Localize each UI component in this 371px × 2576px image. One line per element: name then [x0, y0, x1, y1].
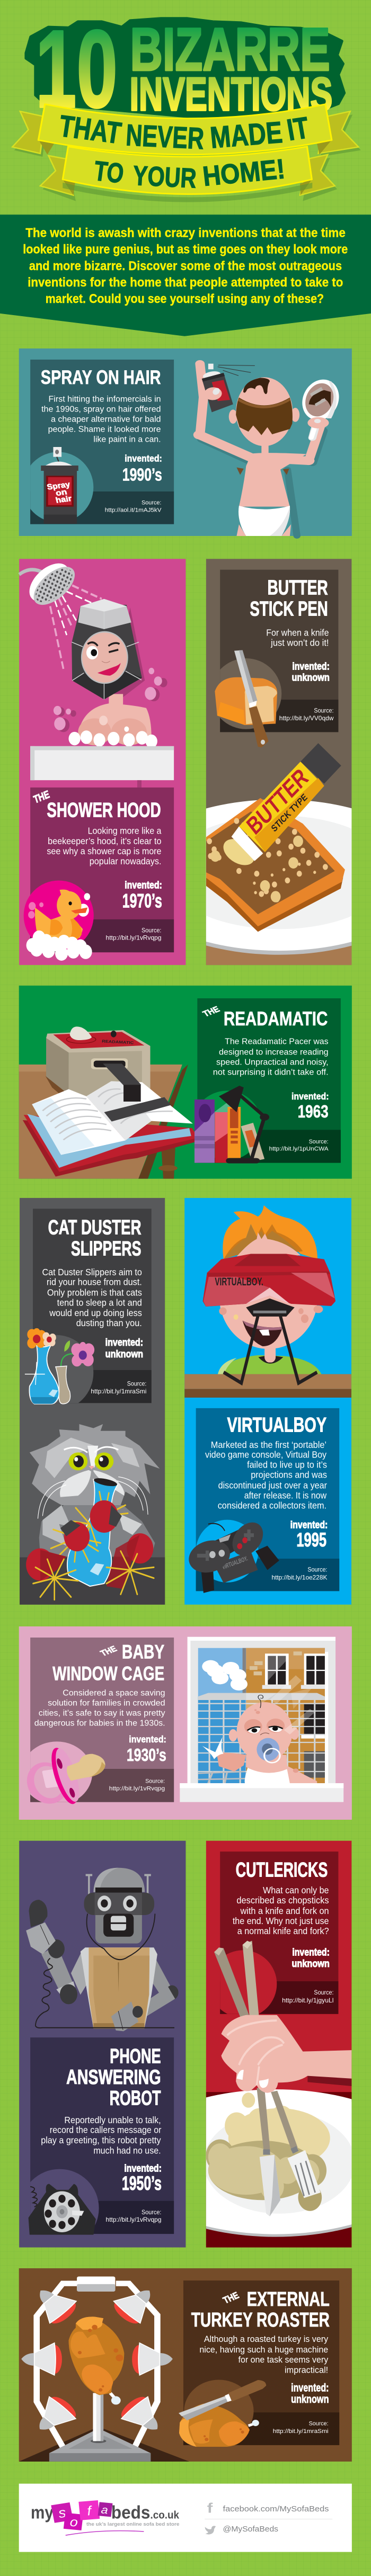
whiskers — [38, 1477, 148, 1519]
invented date — [127, 1734, 166, 1765]
intro chevron background — [0, 214, 371, 336]
torso — [239, 453, 306, 507]
antennas — [86, 1875, 151, 1898]
description: see why a shower cap is more — [47, 846, 161, 856]
description: the end. Why not just use — [233, 1916, 329, 1926]
description — [233, 1885, 329, 1937]
source: Source: — [309, 1139, 329, 1145]
source — [273, 2420, 329, 2435]
invented date: invented: — [291, 2381, 329, 2394]
invented date — [292, 1947, 330, 1969]
description: failed to live up to it’s — [247, 1460, 327, 1470]
description: much had no use. — [93, 2146, 161, 2156]
machine base — [49, 2393, 151, 2462]
facebook link — [207, 2500, 329, 2516]
facebook link: f — [207, 2500, 213, 2516]
hair — [236, 398, 293, 435]
heading — [48, 1215, 142, 1260]
source: http://bit.ly/1vRvqpg — [109, 1785, 165, 1792]
illustration: woman in shower hood — [19, 553, 174, 788]
lamp frame — [37, 2284, 157, 2447]
panel: readamatic — [19, 986, 352, 1179]
description: popular nowadays. — [90, 856, 161, 866]
source — [109, 1778, 165, 1792]
source: http://bit.ly/1jgyuLl — [282, 1997, 333, 2004]
description — [266, 628, 329, 648]
shadow — [111, 607, 145, 706]
invented date: 1995 — [296, 1529, 326, 1551]
source: Source: — [314, 708, 333, 714]
heading: ANSWERING — [66, 2065, 161, 2088]
description: Only problem is that cats — [47, 1288, 142, 1298]
logo: my sofa beds: the uk’s largest online sofa bed store — [86, 2521, 180, 2527]
butter stick — [220, 743, 341, 870]
info card — [210, 570, 338, 732]
description — [199, 2334, 329, 2375]
invented date: invented: — [292, 660, 330, 672]
stand legs — [224, 1316, 317, 1383]
invented date: unknown — [291, 2392, 329, 2405]
footer panel — [19, 2484, 352, 2552]
source — [269, 1139, 329, 1152]
description: nice, having such a huge machine — [199, 2345, 328, 2355]
source: Source: — [314, 1989, 333, 1996]
icon: vases and flowers — [25, 1328, 94, 1404]
icon: rotary telephone — [29, 2184, 96, 2235]
description: cities, it’s safe to say it was pretty — [39, 1709, 165, 1718]
logo: my sofa beds: beds — [111, 2502, 150, 2523]
source: Source: — [142, 499, 161, 506]
description: tend to sleep a lot and — [57, 1298, 142, 1308]
banner text line one: NEVER — [125, 118, 205, 156]
hood — [72, 605, 142, 700]
heading: SHOWER HOOD — [47, 798, 161, 821]
toast spots — [209, 821, 325, 899]
info card — [23, 360, 174, 524]
description — [42, 1267, 142, 1328]
heading: BUTTER — [267, 576, 328, 599]
heading: PHONE — [110, 2044, 161, 2068]
hand — [221, 2015, 351, 2093]
source — [105, 499, 162, 513]
invented date: invented: — [290, 1519, 328, 1531]
description: Considered a space saving — [63, 1688, 165, 1697]
window illustration — [180, 1637, 343, 1802]
icon: game controller — [186, 1516, 279, 1593]
description: with a knife and fork on — [240, 1906, 329, 1916]
panel: cat duster slippers — [17, 1198, 165, 1605]
roasting turkey — [68, 2316, 124, 2404]
source — [106, 927, 161, 942]
heading: EXTERNAL — [247, 2287, 330, 2311]
header title — [12, 8, 361, 202]
held can — [201, 364, 233, 412]
icon: spray can: on — [55, 487, 68, 497]
twitter link: @MySofaBeds — [223, 2525, 278, 2534]
readamatic machine — [46, 1026, 150, 1102]
info card — [33, 1209, 152, 1403]
panel: cutlericks — [206, 1841, 352, 2248]
title outline blob — [26, 19, 344, 121]
description: projections and was — [251, 1470, 327, 1480]
phone handset — [26, 1900, 174, 2028]
shower pipe — [19, 570, 44, 575]
description: video game console, Virtual Boy — [205, 1450, 327, 1460]
head — [219, 1245, 318, 1349]
panel: external turkey roaster — [19, 2268, 352, 2462]
invented date: invented: — [129, 1734, 166, 1745]
invented date — [292, 1091, 329, 1122]
invented date — [122, 453, 162, 485]
panel: shower hood — [19, 553, 186, 965]
fist — [111, 2001, 138, 2031]
info card — [192, 998, 341, 1163]
source: Source: — [145, 1778, 165, 1784]
armpit hair — [236, 468, 289, 475]
heading — [201, 1005, 328, 1030]
invented date: invented: — [105, 1337, 143, 1348]
description: The Readamatic Pacer was — [225, 1037, 329, 1046]
logo: my sofa beds: a — [101, 2503, 109, 2516]
description: play a greeting, this robot pretty — [41, 2135, 161, 2145]
raised left arm — [200, 364, 321, 461]
logo: my sofa beds — [31, 2500, 180, 2535]
intro banner — [0, 214, 371, 336]
icon: pacifier — [23, 1746, 105, 1806]
heading — [250, 576, 328, 620]
foam — [75, 737, 152, 741]
top box — [77, 2276, 115, 2292]
source: http://bit.ly/1oe228K — [272, 1575, 328, 1581]
heading: THE — [201, 1005, 222, 1018]
plate with food — [206, 2089, 352, 2237]
invented date: 1930’s — [127, 1745, 166, 1765]
icon: rubber duck — [24, 880, 94, 953]
description: for one task seems very — [238, 2355, 328, 2365]
invented date — [292, 660, 330, 683]
wires — [87, 1913, 155, 1960]
source: http://bit.ly/1mraSmi — [91, 1388, 146, 1395]
right arm — [152, 1960, 175, 2003]
twitter link — [205, 2525, 278, 2535]
mirror — [298, 378, 343, 438]
heading: STICK PEN — [250, 597, 328, 620]
description: rid your house from dust. — [47, 1277, 142, 1287]
building windows — [265, 1653, 289, 1685]
description: Reportedly unable to talk, — [64, 2115, 161, 2125]
banner text line one: IT — [285, 111, 311, 147]
invented date: unknown — [105, 1348, 143, 1359]
icon: bread and knife — [215, 650, 277, 747]
left arm — [71, 1952, 89, 1995]
description: people. Shame it looked more — [48, 425, 161, 434]
source: http://bit.ly/1mraSmi — [273, 2428, 329, 2435]
illustration: robot — [26, 1868, 179, 2031]
info card — [183, 2280, 339, 2445]
invented date — [122, 880, 162, 912]
invented date: invented: — [292, 1091, 329, 1102]
bubbles — [54, 668, 167, 732]
chopsticks — [214, 1940, 298, 2155]
info card — [220, 1851, 338, 2014]
panel: phone answering robot — [19, 1841, 186, 2248]
invented date: 1950’s — [122, 2173, 162, 2194]
toast — [206, 852, 343, 932]
logo: my sofa beds: o — [69, 2515, 78, 2529]
icon: spray can: hair — [55, 494, 73, 505]
invented date: invented: — [125, 453, 162, 464]
illustration: cat — [26, 1424, 160, 1600]
heading: SLIPPERS — [71, 1237, 142, 1260]
source — [272, 1567, 328, 1581]
description: like paint in a can. — [93, 435, 161, 444]
source: Source: — [309, 2420, 329, 2427]
heading: THE — [32, 789, 51, 806]
face — [82, 632, 128, 683]
description: considered a collectors item. — [218, 1501, 326, 1511]
icon: books and lamp — [195, 1086, 269, 1164]
source: http://bit.ly/VV0qdw — [279, 715, 334, 722]
description: Marketed as the first ‘portable’ — [211, 1440, 326, 1450]
info card — [30, 788, 174, 952]
source — [91, 1381, 146, 1395]
shower head — [23, 553, 81, 613]
red slippers — [26, 1500, 153, 1589]
logo: my sofa beds: my — [31, 2502, 54, 2523]
banner text line one — [57, 109, 311, 156]
source: Source: — [142, 927, 161, 934]
description: Looking more like a — [88, 826, 162, 836]
diaper — [238, 506, 290, 536]
heading: THE — [99, 1644, 119, 1658]
description: dusting than you. — [76, 1318, 142, 1328]
plate — [206, 810, 352, 955]
heading — [52, 1642, 164, 1685]
heading: ROBOT — [110, 2087, 161, 2109]
table — [19, 1065, 188, 1179]
panel: virtualboy — [184, 1198, 351, 1605]
window sill — [180, 1783, 343, 1802]
ribbon two — [63, 147, 312, 194]
heading: VIRTUALBOY — [227, 1413, 326, 1436]
title: 10: 10 — [36, 8, 118, 131]
shirt — [218, 1355, 322, 1375]
panel: butter stick pen — [206, 559, 352, 965]
window frame — [188, 1637, 335, 1783]
illustration: boy with headset — [184, 1205, 351, 1398]
description: designed to increase reading — [219, 1048, 329, 1057]
description: a cheaper alternative for bald — [51, 415, 161, 424]
ribbon tails — [12, 111, 361, 201]
description: Cat Duster Slippers aim to — [42, 1267, 142, 1277]
description: described as chopsticks — [236, 1895, 329, 1906]
heading: WINDOW CAGE — [52, 1663, 164, 1685]
description: would end up doing less — [49, 1308, 142, 1318]
headset — [203, 1254, 335, 1317]
source — [279, 708, 334, 722]
strands over slippers — [33, 1551, 154, 1600]
invented date — [290, 1519, 328, 1551]
banner text line one: MADE — [209, 115, 284, 155]
blue vase — [67, 1480, 118, 1586]
banner text line two: HOME! — [201, 153, 287, 192]
icon: spray can — [41, 447, 78, 524]
heading — [66, 2044, 161, 2109]
muzzle — [60, 1470, 91, 1497]
spray lines — [218, 365, 255, 375]
bath — [30, 746, 174, 780]
icon: turkey and carving knife — [179, 2380, 266, 2447]
description: speed. Unpractical and noisy, — [216, 1058, 329, 1067]
invented date: invented: — [292, 1947, 330, 1958]
description: the 1990s, spray on hair offered — [41, 405, 161, 414]
readamatic machine: READAMATIC — [102, 1039, 134, 1045]
heat lamps — [21, 2279, 173, 2440]
butter label: BUTTER — [242, 764, 313, 840]
description — [205, 1440, 328, 1511]
floor shadow — [19, 2429, 189, 2462]
description: discontinued just over a year — [218, 1481, 328, 1491]
hair — [223, 1205, 317, 1259]
logo: my sofa beds: s — [57, 2505, 67, 2521]
heading: CUTLERICKS — [236, 1858, 328, 1881]
description: after release. It is now — [244, 1490, 326, 1501]
panel: baby window cage — [19, 1626, 352, 1820]
intro text — [23, 226, 348, 306]
panel: spray on hair — [19, 348, 352, 536]
fur head — [30, 1424, 160, 1505]
invented date — [291, 2381, 329, 2405]
banner text line two — [92, 153, 287, 194]
logo: my sofa beds: .co.uk — [150, 2508, 180, 2521]
source: http://bit.ly/1vRvqpg — [106, 2217, 161, 2223]
invented date: unknown — [292, 672, 330, 683]
source: Source: — [127, 1381, 146, 1388]
invented date: 1963 — [298, 1102, 329, 1122]
description: beekeeper’s hood, it’s clear to — [48, 836, 161, 846]
source: http://aol.it/1mAJ5kV — [105, 507, 162, 513]
source: Source: — [307, 1567, 327, 1573]
description: For when a knife — [266, 628, 329, 638]
description — [34, 1688, 165, 1728]
fur body — [39, 1505, 155, 1557]
heading: BABY — [122, 1642, 164, 1663]
invented date: invented: — [125, 880, 162, 891]
glass reflections — [270, 1675, 302, 1704]
head — [95, 1903, 142, 1944]
facebook link: facebook.com/MySofaBeds — [223, 2505, 329, 2514]
knife — [260, 2155, 280, 2216]
plate and toast illustration — [206, 744, 352, 955]
invented date: 1970’s — [122, 891, 162, 912]
banner text line two: YOUR — [132, 159, 197, 194]
table — [184, 1374, 351, 1389]
info card — [30, 2037, 174, 2234]
heading — [32, 789, 161, 821]
icon: game controller: VIRTUALBOY. — [222, 1555, 249, 1571]
invented date — [105, 1337, 143, 1359]
banner text line one: THAT — [57, 109, 123, 150]
description — [41, 2115, 162, 2156]
invented date: unknown — [292, 1958, 330, 1969]
description — [213, 1037, 329, 1077]
invented date — [122, 2163, 162, 2194]
arm shadows — [202, 431, 323, 536]
description: solution for families in crowded — [48, 1698, 165, 1707]
description: dangerous for babies in the 1930s. — [34, 1719, 165, 1728]
source — [282, 1989, 333, 2004]
heading: SPRAY ON HAIR — [41, 367, 161, 388]
invented date: 1990’s — [122, 465, 162, 485]
ribbon two shadow — [63, 183, 312, 202]
description: What can only be — [263, 1885, 329, 1895]
info card — [196, 1408, 339, 1591]
invented date: invented: — [124, 2163, 162, 2174]
source: Source: — [142, 2209, 161, 2216]
eyes — [64, 1447, 118, 1470]
view through window — [198, 1648, 327, 1783]
icon: spray can: Spray — [46, 480, 71, 491]
source: http://bit.ly/1vRvqpg — [106, 935, 161, 942]
description: record the callers message or — [50, 2125, 162, 2135]
neck and chest — [109, 694, 123, 708]
stick type label: STICK TYPE — [269, 791, 309, 834]
description: impractical! — [285, 2365, 328, 2375]
description: not surprising it didn’t take off. — [213, 1068, 329, 1077]
description: just won’t do it! — [270, 638, 329, 648]
description — [41, 395, 161, 444]
spray dashes — [50, 585, 102, 669]
legs — [236, 524, 291, 536]
torso — [81, 1947, 157, 2028]
sprayed hair — [243, 378, 270, 394]
logo: my sofa beds: f — [86, 2503, 93, 2518]
heading: THE — [221, 2290, 241, 2305]
mouth — [243, 1321, 282, 1346]
heading — [191, 2287, 330, 2331]
description: First hitting the infomercials in — [49, 395, 161, 404]
illustration: bald man spraying hair — [193, 364, 343, 536]
source — [106, 2209, 161, 2223]
open book — [23, 1063, 198, 1177]
ears and head — [229, 409, 237, 424]
headset label: VIRTUALBOY. — [215, 1276, 263, 1289]
info card — [21, 1638, 174, 1805]
description: a normal knife and fork? — [237, 1926, 329, 1937]
table — [206, 810, 351, 965]
banner text line two: TO — [92, 155, 126, 189]
source: http://bit.ly/1pUnCWA — [269, 1146, 329, 1152]
baby — [202, 1695, 317, 1783]
strands — [51, 1492, 128, 1562]
ribbon one — [38, 104, 332, 155]
description — [47, 826, 162, 866]
cage — [198, 1696, 245, 1783]
fork — [287, 2150, 321, 2198]
description: Although a roasted turkey is very — [204, 2334, 329, 2344]
heading: CAT DUSTER — [48, 1215, 142, 1239]
